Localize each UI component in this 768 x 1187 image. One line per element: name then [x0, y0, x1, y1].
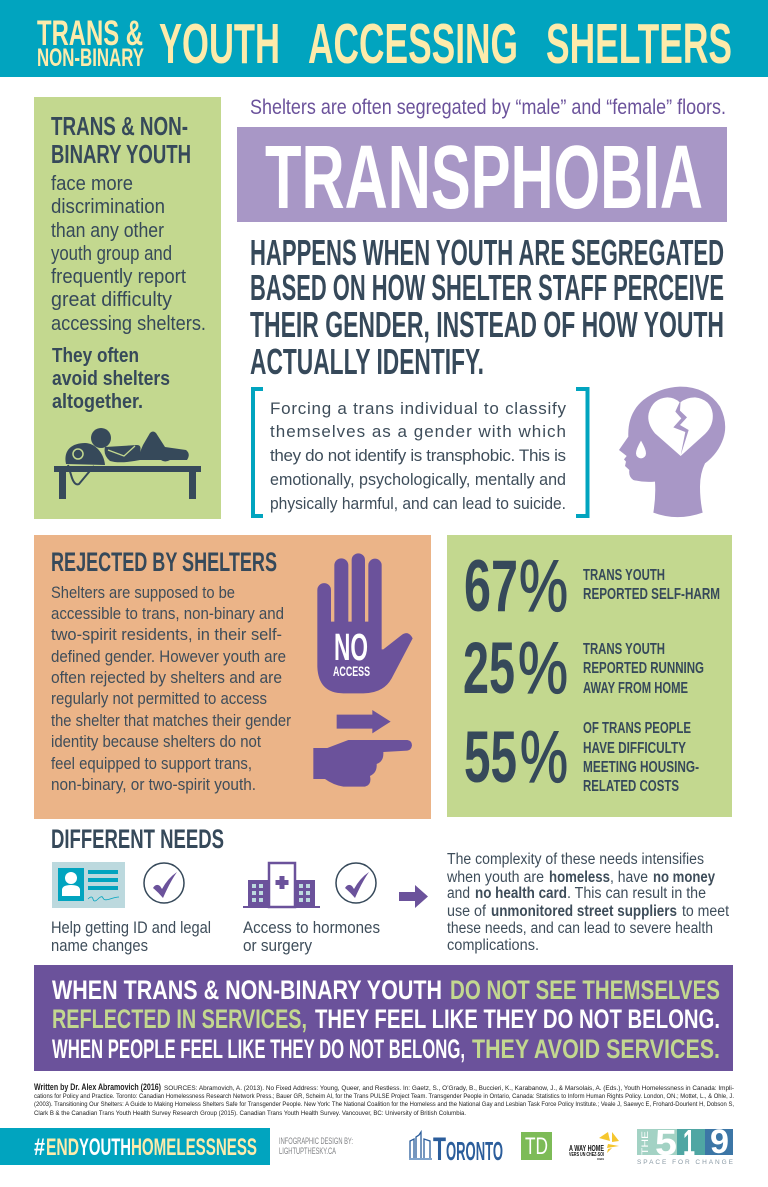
arrow [337, 710, 391, 733]
logo: Toronto [409, 1131, 503, 1167]
logo: The 519: 9 [710, 1123, 729, 1161]
panel heading: BINARY YOUTH [51, 139, 191, 169]
panel body text: face more [51, 173, 133, 195]
text block: complexity of needs: . This can result in the [567, 885, 706, 902]
hashtag bar: END [46, 1134, 79, 1161]
caption: hormones: Access to hormones [243, 919, 380, 937]
stat: 25% running away: TRANS YOUTH [583, 641, 665, 658]
panel body text: Shelters are supposed to be [51, 583, 235, 602]
logo: A Way Home: VERS UN CHEZ-SOI [569, 1152, 604, 1158]
panel emphasis text [52, 345, 170, 413]
text block: complexity of needs: homeless [549, 869, 610, 886]
caption: hormones [243, 919, 380, 955]
stat: 25% running away: % [518, 628, 568, 709]
text block: complexity of needs: to meet [682, 903, 730, 920]
panel body text: great difficulty [51, 289, 172, 311]
stat: 55% housing costs: MEETING HOUSING- [583, 759, 699, 776]
logo: Toronto: T [433, 1131, 446, 1167]
text block: complexity of needs: no health card [475, 885, 567, 902]
panel heading: REJECTED BY SHELTERS [51, 547, 277, 577]
title: YOUTH [159, 12, 280, 76]
text block: complexity of needs: The complexity of these needs intensifies [447, 851, 704, 868]
design credit: INFOGRAPHIC DESIGN BY: [279, 1136, 353, 1147]
text block: complexity of needs: use of [447, 903, 487, 920]
panel body text: the shelter that matches their gender [51, 711, 291, 730]
panel: trans and non-binary youth [34, 97, 221, 519]
hashtag bar: YOUTH [79, 1134, 131, 1161]
panel body text: accessing shelters. [51, 313, 206, 335]
quote text: they do not identify is transphobic. This is [270, 446, 566, 465]
quote text: Forcing a trans individual to classify [270, 399, 566, 418]
icon: hospital [243, 863, 320, 908]
stat: 25% running away [463, 628, 704, 709]
icon: person lying on bench [54, 428, 201, 499]
icon: ID card [52, 862, 125, 908]
conclusion banner [34, 965, 733, 1071]
panel body text [51, 583, 291, 794]
icon: pointing hand [313, 740, 412, 787]
panel emphasis text: avoid shelters [52, 368, 170, 390]
heading: different needs: DIFFERENT NEEDS [51, 824, 224, 854]
text block: complexity of needs: these needs, and can lead to severe health [447, 920, 713, 937]
logo: A Way Home [569, 1132, 619, 1161]
panel body text: frequently report [51, 266, 186, 288]
bracketed quote [253, 389, 588, 516]
main statement [250, 232, 724, 382]
hashtag bar [0, 1128, 270, 1165]
panel emphasis text: altogether. [52, 391, 143, 413]
panel emphasis text: They often [52, 345, 139, 367]
conclusion banner: REFLECTED IN SERVICES, [52, 1004, 307, 1034]
stat: 67% self-harm: 67 [464, 546, 518, 627]
design credit [279, 1136, 353, 1157]
stat: 55% housing costs: OF TRANS PEOPLE [583, 720, 691, 737]
stat: 55% housing costs [464, 717, 699, 798]
quote text [270, 399, 566, 513]
main statement: ACTUALLY IDENTIFY. [250, 341, 484, 382]
text block: complexity of needs: complications. [447, 937, 539, 954]
sources and credit: Written by Dr. Alex Abramovich (2016) [34, 1082, 161, 1092]
panel body text [51, 173, 206, 335]
text block: complexity of needs: , have [610, 869, 648, 886]
logo: Toronto: ORONTO [446, 1136, 503, 1166]
panel body text: than any other [51, 220, 164, 242]
logo: A Way Home: A WAY HOME [569, 1144, 604, 1153]
stat: 55% housing costs: 55 [464, 717, 517, 798]
sources and credit [34, 1082, 734, 1117]
stat: 25% running away: AWAY FROM HOME [583, 680, 688, 697]
arrow [399, 885, 428, 908]
logo: The 519: 5 [655, 1122, 677, 1163]
panel heading [51, 111, 191, 169]
panel body text: two-spirit residents, in their self- [51, 625, 282, 644]
text block: complexity of needs: unmonitored street suppliers [491, 903, 677, 920]
panel body text: feel equipped to support trans, [51, 754, 252, 773]
panel body text: youth group and [51, 243, 172, 265]
panel: statistics [447, 535, 732, 817]
title [37, 12, 732, 76]
panel body text: regularly not permitted to access [51, 689, 267, 708]
stat: 25% running away: REPORTED RUNNING [583, 660, 704, 677]
logo: The 519: THE [640, 1131, 650, 1155]
stat: 55% housing costs: % [520, 717, 568, 798]
logo: The 519 [637, 1122, 734, 1166]
panel body text: discrimination [51, 196, 165, 218]
stat: 67% self-harm: REPORTED SELF-HARM [583, 586, 720, 603]
stat: 67% self-harm: % [519, 546, 568, 627]
sources and credit: SOURCES: Abramovich, A. (2013). No Fixed Address: Young, Queer, and Restless. In: Gaetz, S., O’Grady, B., Buccieri, K., Karabanow, J., & Marsolais, A. (Eds.), Youth Homelessness in Canada: Impli- [164, 1085, 734, 1092]
panel body text: often rejected by shelters and are [51, 668, 282, 687]
icon: head with broken heart [619, 387, 725, 517]
quote text: emotionally, psychologically, mentally and [270, 470, 566, 489]
conclusion banner: WHEN PEOPLE FEEL LIKE THEY DO NOT BELONG, [52, 1034, 465, 1064]
hashtag bar: # [34, 1134, 45, 1161]
hashtag bar: HOMELESSNESS [131, 1134, 257, 1161]
caption: ID [51, 919, 211, 955]
title: NON-BINARY [37, 44, 144, 72]
design credit: LIGHTUPTHESKY.CA [279, 1146, 336, 1157]
logo: TD: TD [525, 1133, 548, 1160]
sources and credit: Clark B & the Canadian Trans Youth Health Survey Research Group (2015). Canadian Trans Youth Health Survey. Vancouver, BC: University of British Columbia. [34, 1110, 466, 1117]
panel body text: accessible to trans, non-binary and [51, 604, 284, 623]
caption: ID: name changes [51, 937, 148, 955]
quote text: physically harmful, and can lead to suicide. [270, 494, 566, 513]
stat: 25% running away: 25 [463, 628, 515, 709]
icon: no access hand: ACCESS [333, 663, 370, 679]
panel body text: identity because shelters do not [51, 732, 261, 751]
logo: The 519: SPACE FOR CHANGE [637, 1159, 734, 1166]
text block: complexity of needs: no money [653, 869, 715, 886]
text block: complexity of needs: when youth are [446, 869, 544, 886]
logo: A Way Home: CANADA [597, 1157, 604, 1161]
logo: The 519: 1 [683, 1122, 695, 1163]
icon: no access hand [317, 553, 413, 693]
panel heading: TRANS & NON- [51, 111, 188, 141]
panel: rejected by shelters [34, 535, 431, 819]
conclusion banner: WHEN TRANS & NON-BINARY YOUTH [52, 975, 442, 1005]
caption: ID: Help getting ID and legal [51, 919, 211, 937]
icon: no access hand: NO [334, 627, 368, 669]
stat: 55% housing costs: RELATED COSTS [583, 778, 679, 795]
text block: complexity of needs: and [447, 885, 470, 902]
icon: check mark [144, 863, 184, 903]
icon: check mark [336, 863, 376, 903]
title: TRANS & [37, 14, 143, 53]
stat: 67% self-harm: TRANS YOUTH [583, 567, 665, 584]
title: ACCESSING [308, 12, 518, 76]
header banner [0, 0, 768, 77]
stat: 67% self-harm [464, 546, 720, 627]
stat: 55% housing costs: HAVE DIFFICULTY [583, 740, 686, 757]
quote text: themselves as a gender with which [270, 422, 566, 441]
text block: complexity of needs [446, 851, 730, 954]
panel body text: non-binary, or two-spirit youth. [51, 775, 256, 794]
panel body text: defined gender. However youth are [51, 647, 286, 666]
caption: hormones: or surgery [243, 937, 313, 955]
